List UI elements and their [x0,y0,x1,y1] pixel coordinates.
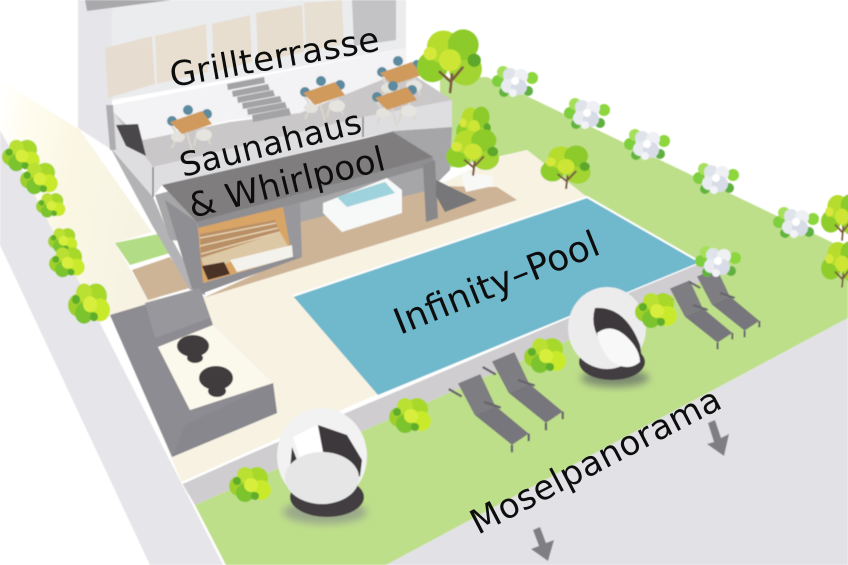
lounge interior rug [158,325,273,410]
glass balustrade [110,100,452,197]
left boundary wall [0,130,223,565]
lounge sofa [110,288,277,457]
curb highlight line [182,262,700,483]
right loungers [662,268,759,349]
terrace back wall [113,48,406,140]
cream side path [0,80,152,323]
roof edge [85,0,172,11]
side table [199,366,233,397]
lower left deck [132,257,193,300]
cream pool terrace [110,150,700,483]
sauna house roof [162,132,433,222]
grill [116,124,146,156]
wood deck [203,186,517,298]
lawn [195,77,848,565]
left hedge [2,140,110,324]
building facade [78,0,406,150]
front loungers [449,352,563,452]
terrace lounger under roof [436,180,477,212]
dining tables [167,105,212,150]
stairs [227,77,291,122]
left wall [78,0,112,150]
grey structure behind sauna [155,127,452,250]
planter [460,172,493,192]
arrow: view right [707,420,729,456]
rear daybed [568,287,649,387]
label: Saunahaus: Saunahaus [176,102,365,185]
right roof column [423,160,438,222]
trees [417,29,848,288]
wall right of sauna [283,203,302,257]
sauna sill [203,257,302,293]
whirlpool [323,178,402,232]
terrace corner post [106,105,116,150]
windows [105,36,155,98]
lower grey strip [386,318,848,565]
terrace underside [110,147,200,290]
small lawn patch [115,232,170,265]
arrow: view left [531,527,554,561]
lawn bushes [229,293,677,502]
grey pool curb [182,262,718,505]
infinity pool [293,197,700,395]
pool top edge [293,197,700,296]
front daybed [277,408,367,524]
flowering shrubs [492,66,819,277]
left wall column [165,200,205,295]
label: Grillterrasse: Grillterrasse [167,20,382,96]
roof fascia [197,157,433,231]
sauna interior [198,207,293,283]
side table [177,335,209,363]
label: Infinity-Pool: Infinity–Pool [388,224,605,343]
label: Whirlpool: & Whirlpool [185,139,389,227]
label: Moselpanorama: Moselpanorama [464,380,728,543]
terrace floor [113,70,452,167]
